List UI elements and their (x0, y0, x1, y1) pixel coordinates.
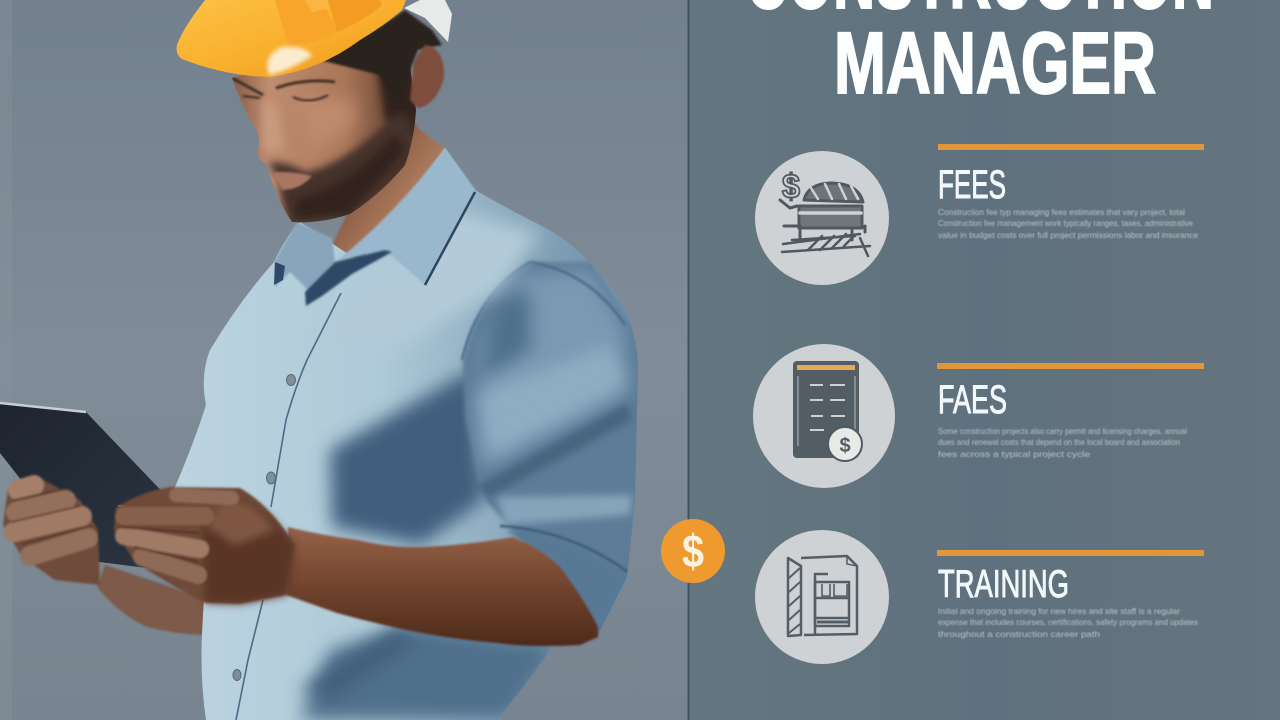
icon: ledger document with badge (753, 344, 895, 488)
title (746, 0, 1214, 112)
panel: fees (755, 144, 1204, 285)
panel: faes (753, 344, 1204, 488)
beard (268, 112, 412, 228)
near forearm (286, 527, 598, 646)
description: fees: Construction fee typ managing fees estimates that vary project, total (938, 207, 1185, 217)
title line: manager: MANAGER (834, 15, 1156, 112)
description: training: throughout a construction career path (938, 629, 1100, 639)
description: faes: dues and renewal costs that depend on the local board and association (938, 437, 1180, 447)
description: training: Initial and ongoing training for new hires and site staff is a regular (938, 606, 1180, 616)
photo: construction manager holding a tablet (0, 0, 640, 720)
icon: fees burger-shaped building with dollar: $ (782, 168, 800, 206)
left hand (3, 478, 100, 585)
hard hat (177, 0, 406, 77)
icon: fees burger-shaped building with dollar (755, 151, 889, 285)
description: fees: value in budget costs over full project permissions labor and insurance (938, 230, 1198, 240)
panel: left photo background (0, 0, 689, 720)
panel: right content background (689, 0, 1280, 720)
heading: faes: FAES (938, 378, 1007, 422)
rule (938, 144, 1204, 150)
vertical divider line (688, 0, 690, 720)
cheek highlight (306, 96, 362, 146)
heading: training: TRAINING (938, 563, 1069, 606)
eyes and brows (232, 78, 335, 95)
ear (410, 45, 444, 108)
description: training (938, 606, 1198, 639)
description: faes (938, 426, 1187, 459)
shirt buttons (233, 374, 296, 680)
left edge strip (0, 0, 12, 720)
collar (274, 148, 475, 306)
heading: fees: FEES (938, 163, 1006, 207)
hard hat strap (404, 0, 452, 42)
badge: orange dollar (661, 519, 725, 583)
neck (330, 100, 447, 262)
description: faes: fees across a typical project cycle (938, 449, 1090, 459)
description: faes: Some construction projects also carry permit and licensing charges, annual (938, 426, 1187, 436)
shirt torso (175, 148, 640, 720)
icon: training manual (755, 530, 889, 664)
head and face (225, 10, 444, 230)
nose highlight (262, 100, 285, 150)
tablet (0, 403, 172, 568)
description: fees (938, 207, 1198, 240)
hair (320, 10, 442, 108)
lips (272, 172, 312, 190)
icon: ledger document with badge: $ (839, 435, 851, 457)
badge: orange dollar: $ (682, 525, 704, 577)
stubble core (295, 135, 405, 218)
panel: training (755, 530, 1204, 664)
rule (937, 550, 1204, 556)
rule (937, 363, 1204, 369)
shirt placket (236, 293, 341, 720)
description: fees: Construction fee management work typically ranges, taxes, administrative (938, 218, 1193, 228)
temple shadow (373, 68, 416, 136)
description: training: expense that includes courses, certifications, safety programs and updates (938, 617, 1198, 627)
right hand (114, 487, 295, 604)
far arm (97, 565, 210, 635)
